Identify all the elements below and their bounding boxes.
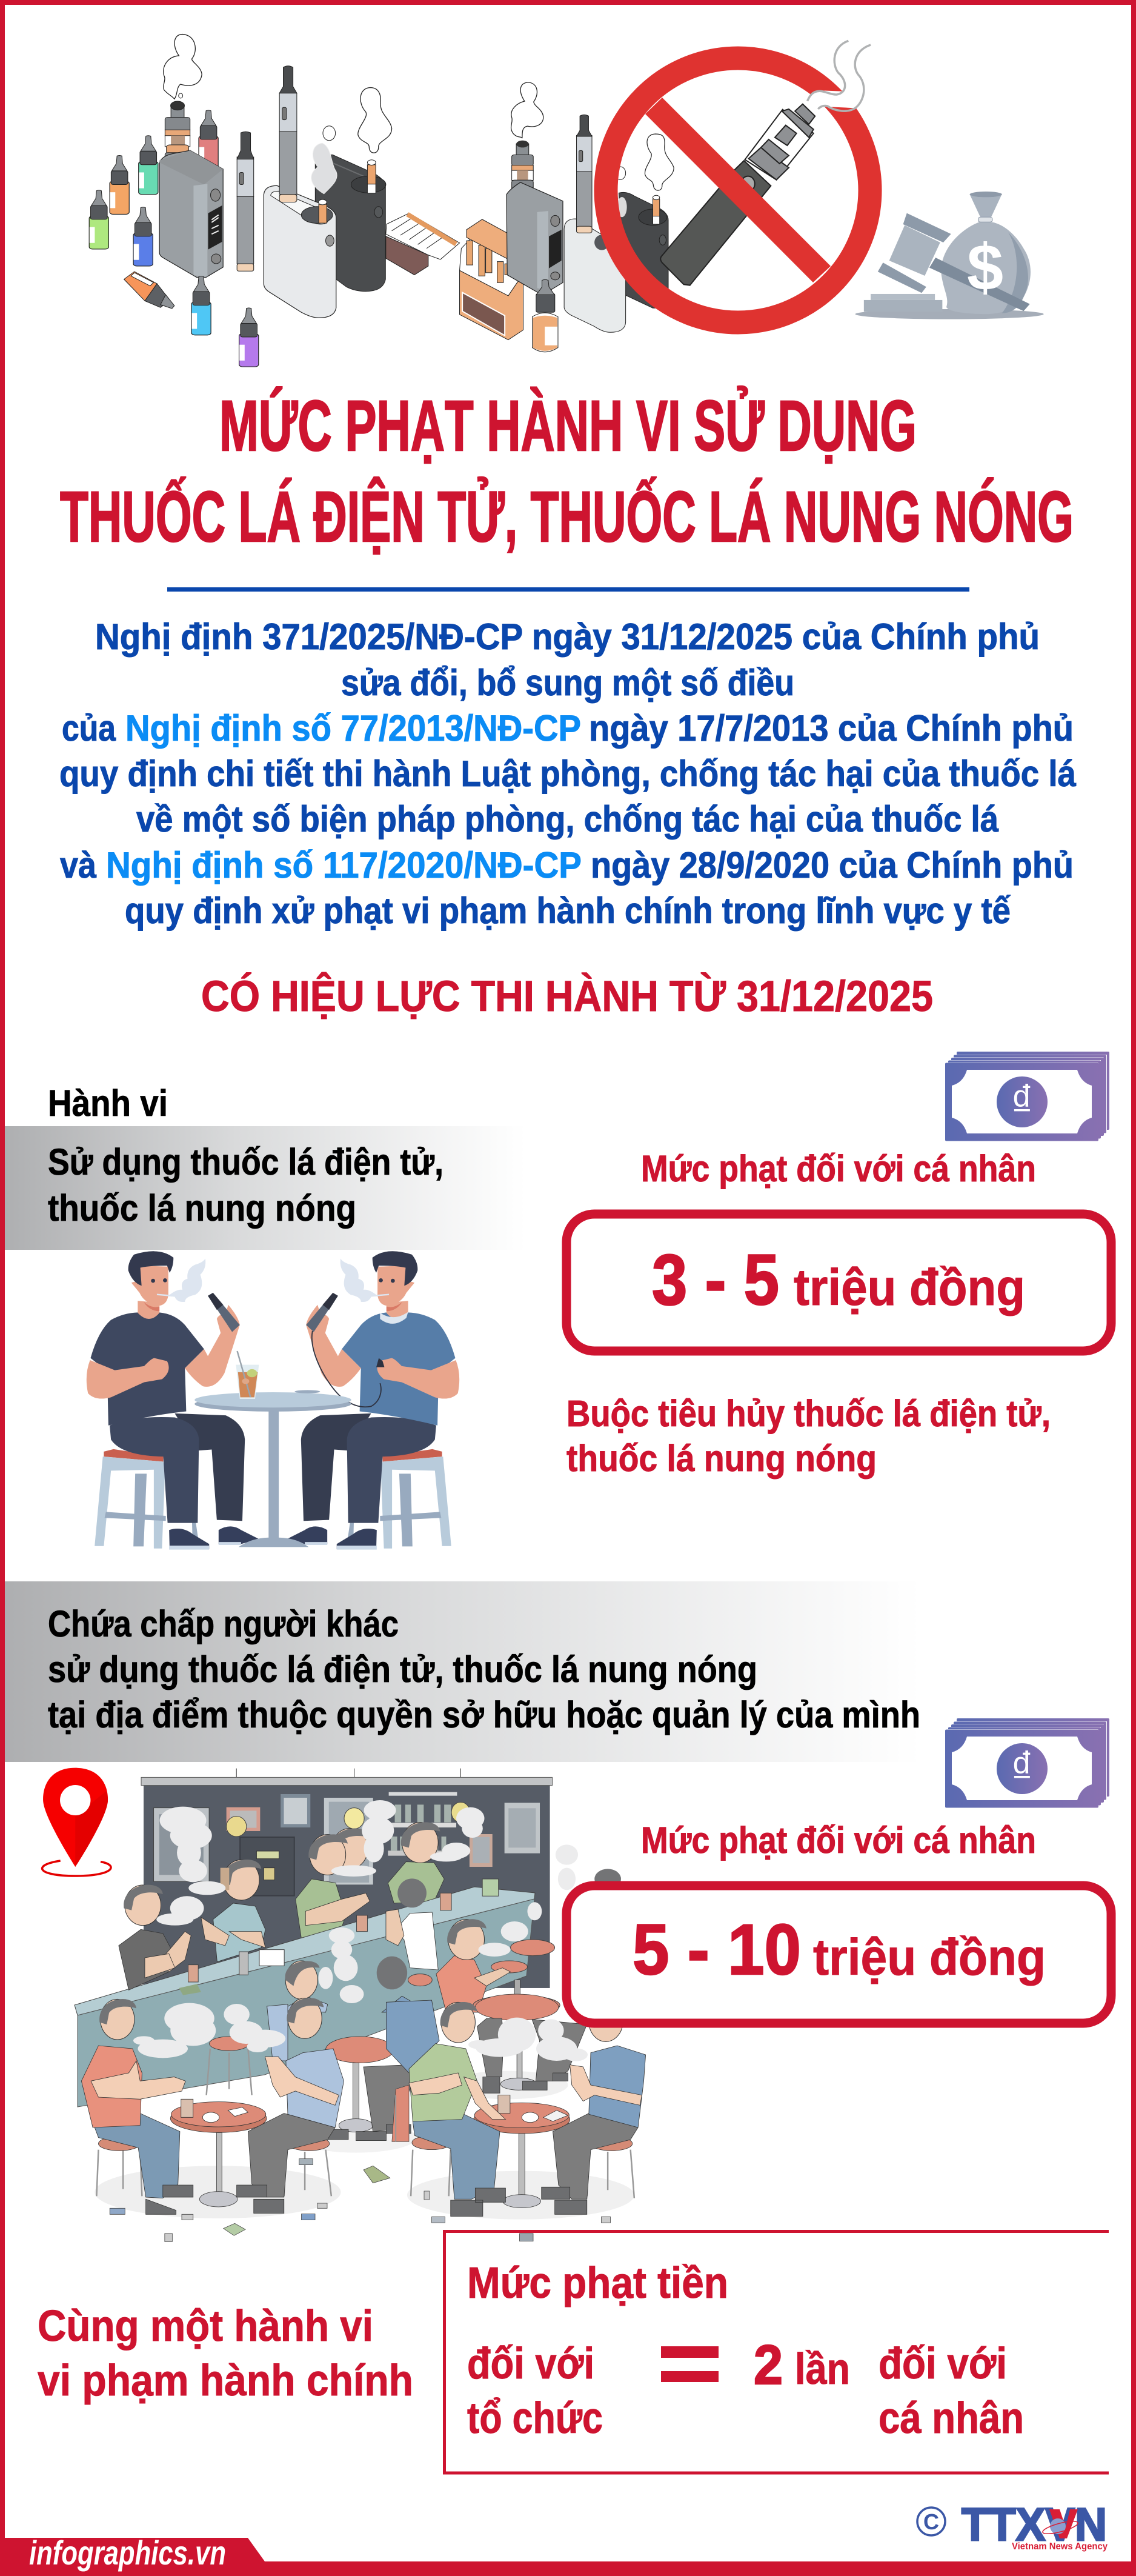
text block: destroy requirement <box>566 1393 1051 1479</box>
text block: decree description: về một số biện pháp phòng, chống tác hại của thuốc lá <box>136 799 999 839</box>
cord <box>312 1331 381 1407</box>
text block: destroy requirement: thuốc lá nung nóng <box>566 1438 877 1479</box>
text block: same violation <box>38 2302 413 2405</box>
icon: vape device in sign <box>660 104 815 285</box>
person: light blue shirt <box>237 2049 344 2214</box>
icon: location pin <box>42 1768 111 1876</box>
panel: fine box one <box>566 1214 1111 1351</box>
icon: white heated tobacco device <box>264 185 336 318</box>
icon: pen vape behind sign <box>577 115 592 233</box>
panel: behaviour two band <box>0 1581 920 1762</box>
person: green shirt <box>409 2044 505 2217</box>
smoke clouds upper <box>156 1800 578 2003</box>
icon: gavel and money bag <box>855 192 1044 319</box>
panel: organisation fine comparison: lần <box>795 2345 850 2394</box>
icon: box mod one <box>159 101 223 278</box>
illustration: vape devices and e-liquid bottles <box>89 35 563 367</box>
illustration: crowded bar scene, lower part <box>81 1994 646 2241</box>
text block: decree description <box>59 616 1077 931</box>
effective date: CÓ HIỆU LỰC THI HÀNH TỪ 31/12/2025 <box>201 972 933 1021</box>
icon: cigarette pack <box>460 219 533 340</box>
table one <box>170 2099 267 2207</box>
background tables and stools <box>207 1994 587 2141</box>
label: individual fine two: Mức phạt đối với cá nhân <box>641 1820 1036 1861</box>
litter on the floor <box>110 2159 611 2241</box>
text block: decree description: ngày 17/7/2013 của Chính phủ <box>589 708 1074 749</box>
person: salmon shirt <box>81 2046 193 2214</box>
icon: box mod two <box>507 141 563 293</box>
panel: organisation fine comparison: cá nhân <box>879 2394 1024 2443</box>
icon: pen vape short <box>237 132 254 271</box>
icon: lying bottle <box>124 272 174 309</box>
logo: TTXVN: Vietnam News Agency <box>1012 2541 1108 2552</box>
panel: behaviour one band: Sử dụng thuốc lá điện tử, <box>48 1141 443 1183</box>
table two <box>411 2095 570 2208</box>
panel: fine box two: triệu đồng <box>813 1929 1046 1986</box>
icon: equals sign <box>661 2346 719 2382</box>
text block: decree description: Nghị định 371/2025/NĐ-CP ngày 31/12/2025 của Chính phủ <box>95 616 1040 657</box>
title <box>60 385 1074 557</box>
text block: decree description: và <box>60 845 97 886</box>
panel: organisation fine comparison: tổ chức <box>467 2394 603 2443</box>
text block: decree description: của <box>62 708 116 749</box>
panel: behaviour two band: tại địa điểm thuộc quyền sở hữu hoặc quản lý của mình <box>48 1694 920 1735</box>
panel: organisation fine comparison: 2 <box>754 2334 783 2396</box>
panel: behaviour two band: Chứa chấp người khác <box>48 1603 399 1644</box>
logo: TTXVN: C <box>923 2509 939 2534</box>
icon: dong symbol one: ₫ <box>1011 1076 1034 1126</box>
icon: black device behind sign <box>619 192 668 308</box>
text block: decree description: quy định xử phạt vi phạm hành chính trong lĩnh vực y tế <box>125 890 1011 931</box>
icon: black heated tobacco device <box>315 155 386 292</box>
people behind the counter <box>201 1862 444 1962</box>
person: right blue shirt <box>542 2046 646 2214</box>
icon: smoke cloud two <box>358 88 392 153</box>
text block: same violation: Cùng một hành vi <box>38 2302 373 2351</box>
icon: smoke cloud one <box>164 35 202 99</box>
panel: behaviour one band: thuốc lá nung nóng <box>48 1187 356 1229</box>
illustration: crowded bar scene, middle people <box>119 1800 621 2015</box>
icon: drink glass <box>236 1351 259 1399</box>
heading: behaviour: Hành vi <box>48 1083 168 1124</box>
text block: destroy requirement: Buộc tiêu hủy thuốc lá điện tử, <box>566 1393 1051 1434</box>
collar of right man <box>380 1312 408 1324</box>
icon: banknote one <box>945 1052 1109 1141</box>
icon: dong symbol two: ₫ <box>1011 1743 1034 1793</box>
icon: smoke strokes <box>807 41 871 111</box>
icon: smoke cloud three <box>511 82 543 138</box>
text block: same violation: vi phạm hành chính <box>38 2357 413 2405</box>
icon: smoke cloud four <box>645 134 674 190</box>
panel: organisation fine comparison <box>445 2232 1109 2473</box>
footer tab: infographics.vn <box>29 2534 226 2572</box>
icon: large bottle <box>532 279 558 352</box>
smoke clouds lower <box>133 2003 588 2061</box>
illustration: crowded bar scene, counter <box>75 1887 535 2107</box>
panel: fine box two <box>566 1886 1111 2023</box>
icon: banknote two <box>945 1718 1109 1807</box>
footer tab <box>0 2534 1136 2576</box>
text block: decree description: sửa đổi, bổ sung một số điều <box>341 662 794 703</box>
panel: fine box two: 5 - 10 <box>633 1910 801 1990</box>
panel: behaviour one band <box>0 1126 525 1250</box>
illustration: crowded bar scene, upper part <box>42 1768 553 1988</box>
illustration: prohibition sign, vape device, gavel and money bag <box>564 41 1044 332</box>
icon: white device behind sign <box>564 219 626 332</box>
icon: dollar sign: $ <box>967 230 1003 304</box>
panel: fine box one: 3 - 5 <box>652 1240 779 1320</box>
text block: decree description: Nghị định số 117/2020/NĐ-CP <box>106 845 582 886</box>
panel: organisation fine comparison: đối với <box>467 2340 594 2388</box>
illustration: two men vaping at a table <box>87 1251 459 1550</box>
text block: decree description: ngày 28/9/2020 của Chính phủ <box>591 845 1074 886</box>
panel: fine box one: triệu đồng <box>794 1259 1025 1316</box>
panel: organisation fine comparison: đối với <box>879 2340 1007 2388</box>
label: individual fine one: Mức phạt đối với cá nhân <box>641 1148 1036 1189</box>
icon: loose cigarettes <box>386 213 460 275</box>
panel: behaviour two band: sử dụng thuốc lá điện tử, thuốc lá nung nóng <box>48 1649 757 1690</box>
text block: decree description: Nghị định số 77/2013/NĐ-CP <box>125 708 581 749</box>
panel: organisation fine comparison: Mức phạt tiền <box>467 2259 728 2307</box>
icon: pen vape tall <box>279 66 297 202</box>
logo: TTXVN: TTXVN <box>962 2499 1107 2551</box>
icon: prohibition slash <box>645 98 831 282</box>
icon: prohibition ring <box>606 58 870 322</box>
